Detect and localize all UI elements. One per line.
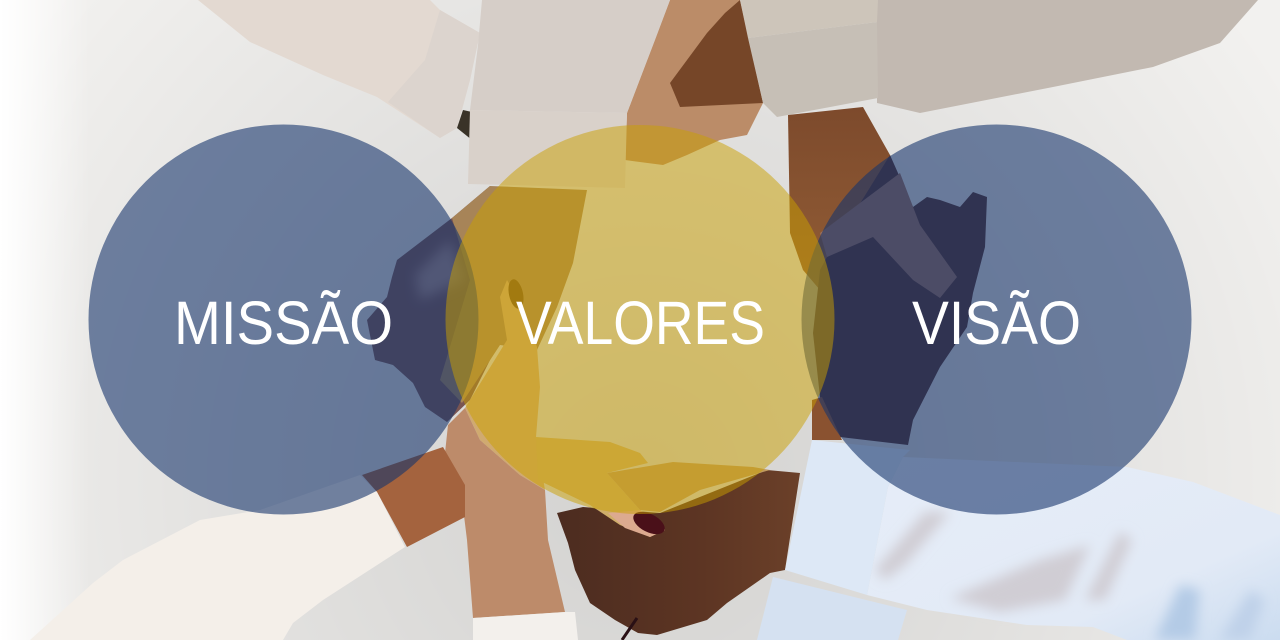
label: valores: VALORES	[516, 289, 765, 357]
circle: visão	[802, 124, 1192, 514]
arm: back of hand	[440, 186, 587, 403]
bottom-left sleeve	[30, 475, 405, 640]
label: visão: VISÃO	[912, 289, 1081, 357]
lady forearm: lower tone	[445, 408, 565, 618]
bottom-left arm	[362, 447, 465, 547]
top-right cuff	[740, 0, 878, 117]
bottom-center cuff	[473, 612, 578, 640]
right dark hand	[813, 155, 987, 445]
sleeve folds	[875, 512, 1265, 640]
thumb: right hand	[820, 173, 957, 298]
left hand	[367, 186, 500, 422]
nail	[630, 507, 668, 539]
top-center forearm	[670, 0, 763, 107]
lady hand	[536, 437, 665, 537]
lady forearm	[465, 280, 545, 490]
top-center sleeve	[468, 0, 670, 188]
bottom dark hand	[557, 470, 800, 635]
lower right wrist	[812, 397, 842, 440]
bottom-right cuff	[785, 440, 910, 595]
pen	[622, 618, 637, 640]
top-right sleeve	[877, 0, 1258, 113]
circle: valores	[446, 125, 834, 514]
circle: missão	[88, 124, 478, 514]
fingertip	[608, 510, 665, 537]
bottom-right lower sleeve	[757, 577, 907, 640]
top-left sleeve	[198, 0, 480, 140]
right forearm	[788, 107, 905, 300]
thumbnail	[506, 278, 526, 310]
bottom-right sleeve	[867, 457, 1280, 640]
label: missão: MISSÃO	[174, 289, 393, 357]
other hand fingers	[607, 462, 770, 512]
top-center hand	[625, 0, 763, 165]
